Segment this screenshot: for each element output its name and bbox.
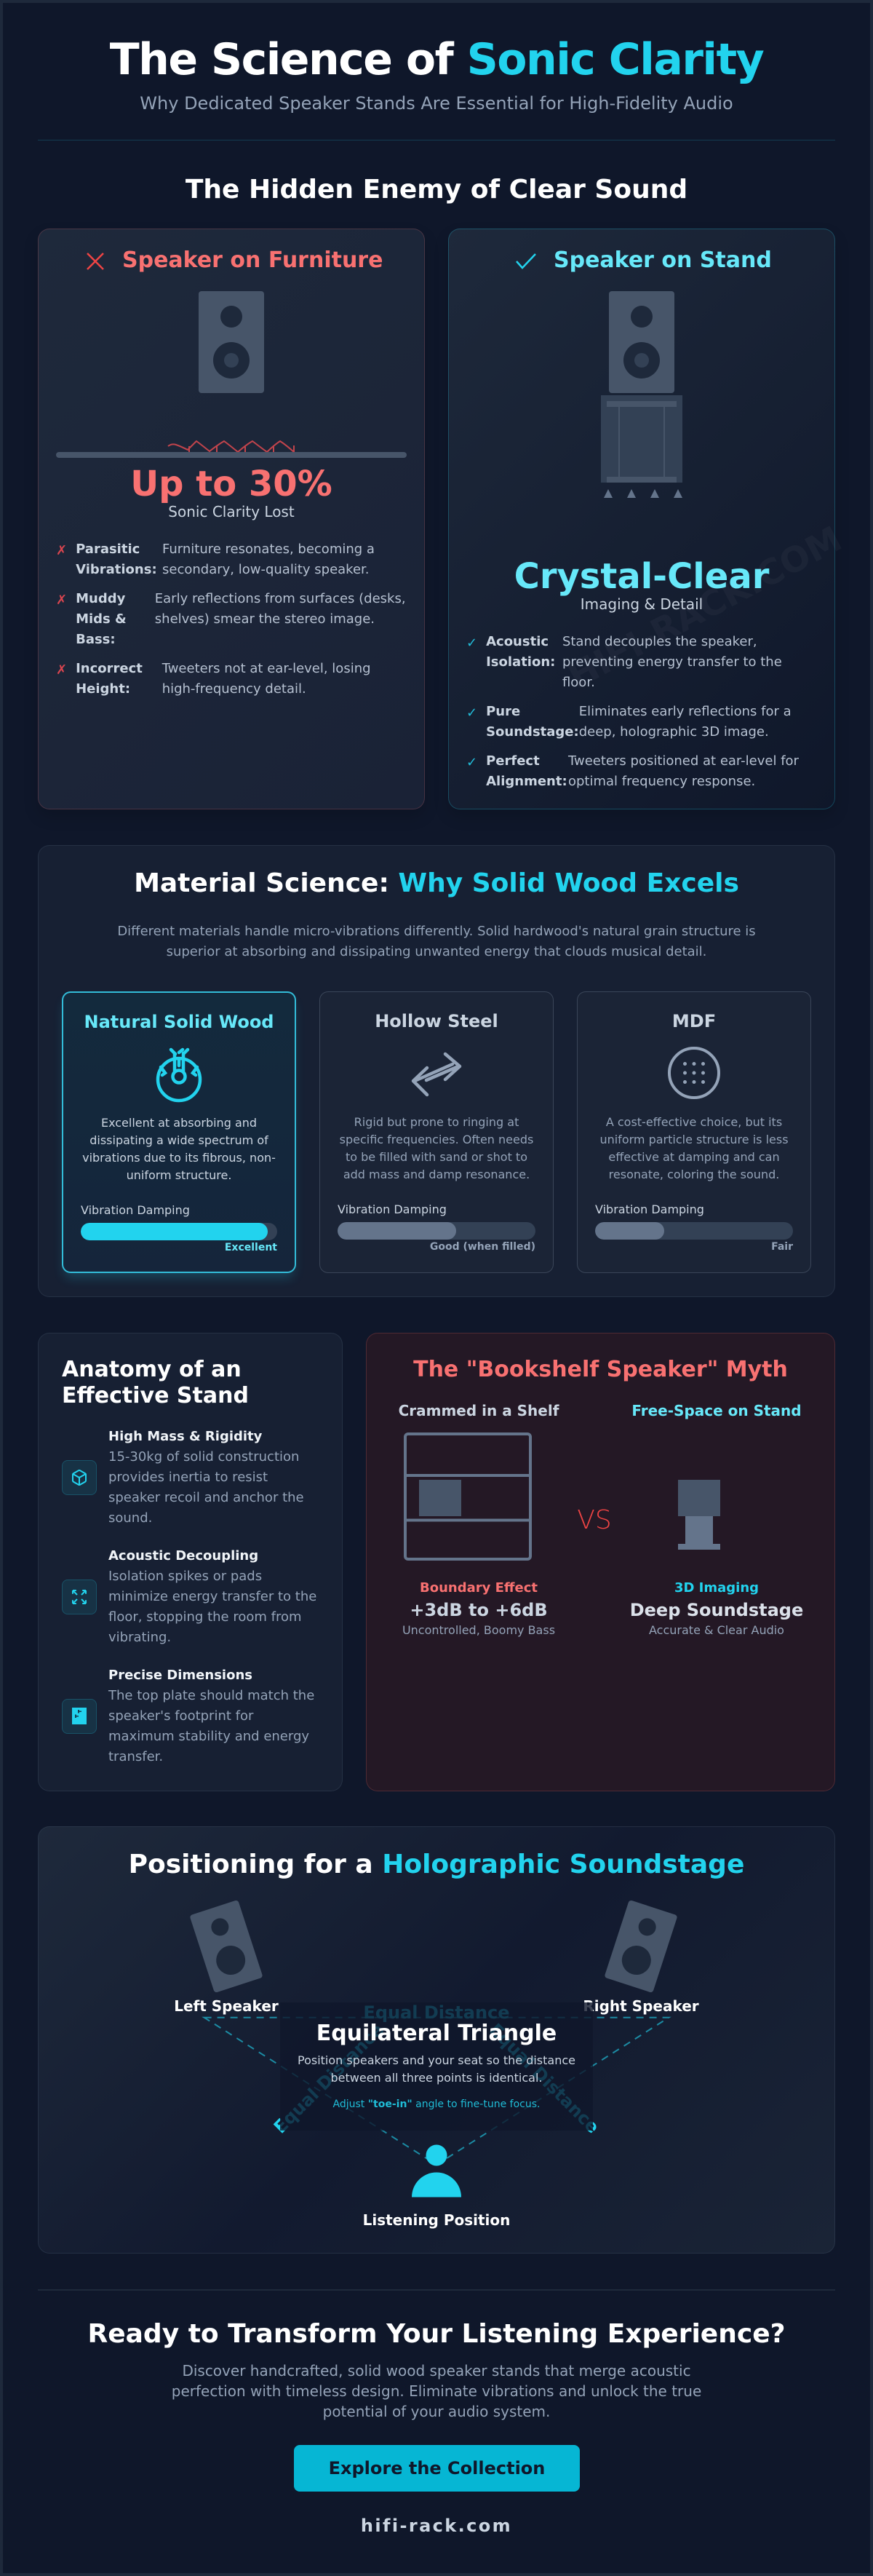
list: stand benefits: Stand decouples the speaker, preventing energy transfer to the floor. (562, 634, 782, 690)
heading: positioning: Positioning for a Holographic Soundstage (129, 1850, 744, 1879)
list: furniture problems: Incorrect Height: (76, 661, 143, 697)
feature: dimensions: The top plate should match the (108, 1688, 314, 1703)
speaker labels: Right Speaker (583, 1997, 699, 2015)
stat: 3d imaging: Accurate & Clear Audio (649, 1623, 784, 1637)
call to action text: potential of your audio system. (323, 2403, 550, 2420)
icon: wood grain (156, 1048, 202, 1102)
feature: dimensions: speaker's footprint for (108, 1708, 253, 1724)
icon: speaker on shelf (199, 291, 264, 393)
list: furniture problems: Parasitic Vibrations: (76, 542, 157, 577)
feature: decoupling: floor, stopping the room from (108, 1609, 301, 1625)
card text (599, 1115, 789, 1181)
list: stand benefits: Perfect Alignment: (486, 753, 567, 789)
icon: speaker on stand (678, 1480, 720, 1550)
triangle lines (204, 2018, 669, 2165)
column heading: stand: Free-Space on Stand (631, 1402, 802, 1419)
damping label: Vibration Damping (338, 1202, 447, 1216)
list: furniture problems: Muddy Mids & Bass: (76, 591, 127, 647)
list: furniture problems: ✗ (56, 662, 67, 678)
card text: specific frequencies. Often needs (340, 1133, 533, 1146)
callout: equilateral triangle (280, 2002, 593, 2131)
list: furniture problems: Furniture resonates, becoming a secondary, low-quality speaker. (162, 542, 375, 577)
damping label: Vibration Damping (81, 1203, 190, 1217)
stat: 3d imaging: 3D Imaging (674, 1580, 759, 1596)
distance labels: Equal Distance (485, 2019, 603, 2138)
vibration wave and shelf (56, 440, 407, 458)
card text: to be filled with sand or shot to (346, 1150, 527, 1164)
distance labels: Equal Distance (270, 2019, 388, 2138)
icon: listener (412, 2144, 461, 2197)
feature: decoupling: minimize energy transfer to the (108, 1589, 316, 1604)
icon: right speaker (604, 1900, 678, 1993)
callout tip: Adjust "toe-in" angle to fine-tune focus. (333, 2099, 540, 2110)
stat: 3d imaging (630, 1580, 803, 1637)
diagram: equilateral triangle (174, 1901, 699, 2229)
button (294, 2445, 580, 2492)
column heading: shelf: Crammed in a Shelf (399, 1402, 559, 1419)
feature: high mass: provides inertia to resist (108, 1470, 268, 1485)
heading: material science: Material Science: Why Solid Wood Excels (134, 868, 739, 898)
panel heading: stand: Speaker on Stand (554, 247, 772, 273)
distance labels (270, 2002, 603, 2138)
panel: anatomy of a stand (38, 1333, 343, 1791)
heading: anatomy: Effective Stand (62, 1383, 249, 1408)
list: furniture problems: ✗ (56, 543, 67, 558)
feature: high mass (108, 1429, 304, 1526)
card text: Excellent at absorbing and (101, 1116, 257, 1130)
listener label: Listening Position (363, 2211, 510, 2229)
icon: steel arrows (412, 1053, 461, 1096)
button: Explore the Collection (329, 2458, 545, 2478)
icon: red cross (87, 253, 104, 270)
stat: boundary effect: +3dB to +6dB (410, 1600, 548, 1620)
distance labels: Equal Distance (363, 2002, 510, 2023)
stat: boundary effect (402, 1580, 555, 1637)
panel: positioning (38, 1826, 835, 2254)
speaker labels: Left Speaker (174, 1997, 279, 2015)
speaker labels (174, 1997, 699, 2015)
list: stand benefits: ✓ (466, 705, 477, 721)
list: stand benefits: Eliminates early reflections for a deep, holographic 3D image. (579, 704, 792, 740)
stat caption: Sonic Clarity Lost (168, 503, 295, 520)
icon: left speaker (189, 1900, 263, 1993)
card text: resonate, coloring the sound. (609, 1168, 779, 1181)
list: furniture problems: ✗ (56, 593, 67, 608)
callout heading: Equilateral Triangle (316, 2021, 557, 2046)
callout text: between all three points is identical. (330, 2071, 543, 2085)
panel heading: furniture: Speaker on Furniture (122, 247, 383, 273)
heading: anatomy: Anatomy of an (62, 1357, 242, 1382)
card: mdf (577, 991, 811, 1273)
feature: decoupling: Acoustic Decoupling (108, 1548, 258, 1564)
icon: crammed shelf (404, 1432, 532, 1561)
watermark: HIFI-RACK.COM (562, 518, 848, 697)
subtitle: Why Dedicated Speaker Stands Are Essential for High-Fidelity Audio (140, 93, 733, 114)
card text: uniform structure. (127, 1168, 231, 1182)
icon: check (516, 253, 536, 269)
icon: decoupling arrows (62, 1580, 97, 1614)
intro text (117, 924, 756, 959)
website: hifi-rack.com (361, 2516, 512, 2536)
list: furniture problems: Tweeters not at ear-level, losing high-frequency detail. (162, 661, 371, 697)
feature: high mass: sound. (108, 1510, 152, 1526)
call to action text: Discover handcrafted, solid wood speaker stands that merge acoustic (182, 2362, 691, 2379)
panel: speaker on furniture (38, 229, 425, 809)
card text: dissipating a wide spectrum of (89, 1133, 268, 1147)
feature: dimensions: maximum stability and energy (108, 1729, 309, 1744)
stat: crystal-clear: Crystal-Clear (514, 556, 769, 597)
stat caption: Imaging & Detail (581, 595, 703, 613)
card text: effective at damping and can (608, 1150, 780, 1164)
icon: cube (62, 1460, 97, 1495)
panel: bookshelf myth (366, 1333, 835, 1791)
feature: high mass: High Mass & Rigidity (108, 1429, 262, 1444)
stat: 3d imaging: Deep Soundstage (630, 1600, 803, 1620)
damping bar 60% (338, 1222, 535, 1240)
stat: boundary effect: Uncontrolled, Boomy Bass (402, 1623, 555, 1637)
call to action text (172, 2362, 701, 2420)
card text (82, 1116, 276, 1182)
card text: A cost-effective choice, but its (606, 1115, 782, 1129)
card text: Rigid but prone to ringing at (354, 1115, 519, 1129)
heading: anatomy (62, 1357, 249, 1408)
list: furniture problems: Early reflections from surfaces (desks, shelves) smear the stereo image. (155, 591, 406, 627)
stat: up to 30%: Up to 30% (130, 464, 332, 504)
list: stand benefits: Tweeters positioned at ear-level for optimal frequency response. (568, 753, 799, 789)
card text: uniform particle structure is less (599, 1133, 789, 1146)
list: stand benefits: Pure Soundstage: (486, 704, 579, 740)
list: stand benefits (466, 634, 799, 789)
card text: add mass and damp resonance. (343, 1168, 530, 1181)
list: stand benefits: Acoustic Isolation: (486, 634, 555, 670)
panel: speaker on stand (448, 229, 835, 809)
callout text: Position speakers and your seat so the distance (298, 2053, 575, 2067)
card text: vibrations due to its fibrous, non- (82, 1151, 276, 1165)
card: hollow steel (319, 991, 554, 1273)
feature: decoupling (108, 1548, 316, 1645)
list: stand benefits: ✓ (466, 635, 477, 651)
intro text: Different materials handle micro-vibrations differently. Solid hardwood's natural grain structure is (117, 924, 756, 939)
list: furniture problems (56, 542, 406, 697)
call to action heading: Ready to Transform Your Listening Experience? (87, 2319, 786, 2349)
list: stand benefits: ✓ (466, 755, 477, 770)
feature: dimensions: Precise Dimensions (108, 1668, 252, 1683)
damping value: Good (when filled) (430, 1241, 535, 1253)
card: natural solid wood (62, 991, 296, 1273)
feature: decoupling: vibrating. (108, 1630, 171, 1645)
callout text (298, 2053, 575, 2085)
intro text: superior at absorbing and dissipating unwanted energy that clouds musical detail. (167, 944, 706, 959)
feature: decoupling: Isolation spikes or pads (108, 1569, 262, 1584)
feature: dimensions (108, 1668, 314, 1764)
card title: Hollow Steel (375, 1011, 498, 1031)
feature: high mass: speaker recoil and anchor the (108, 1490, 304, 1505)
damping value: Fair (771, 1241, 793, 1253)
damping label: Vibration Damping (595, 1202, 704, 1216)
card text (340, 1115, 533, 1181)
vs label: VS (577, 1505, 612, 1535)
title: The Science of Sonic Clarity (110, 34, 763, 85)
heading: myth: The "Bookshelf Speaker" Myth (413, 1357, 788, 1382)
icon: speaker on stand (601, 291, 682, 498)
damping value: Excellent (225, 1242, 277, 1253)
panel: material science (38, 845, 835, 1297)
card title: Natural Solid Wood (84, 1012, 274, 1032)
feature: high mass: 15-30kg of solid construction (108, 1449, 299, 1465)
feature: dimensions: transfer. (108, 1749, 163, 1764)
call to action text: perfection with timeless design. Eliminate vibrations and unlock the true (172, 2382, 701, 2400)
damping bar 95% (81, 1223, 277, 1240)
card title: MDF (672, 1011, 716, 1031)
icon: particle board (668, 1047, 720, 1099)
damping bar 35% (595, 1222, 793, 1240)
stat: boundary effect: Boundary Effect (420, 1580, 538, 1596)
heading: hidden enemy: The Hidden Enemy of Clear Sound (186, 175, 687, 205)
icon: dimensions (62, 1699, 97, 1734)
